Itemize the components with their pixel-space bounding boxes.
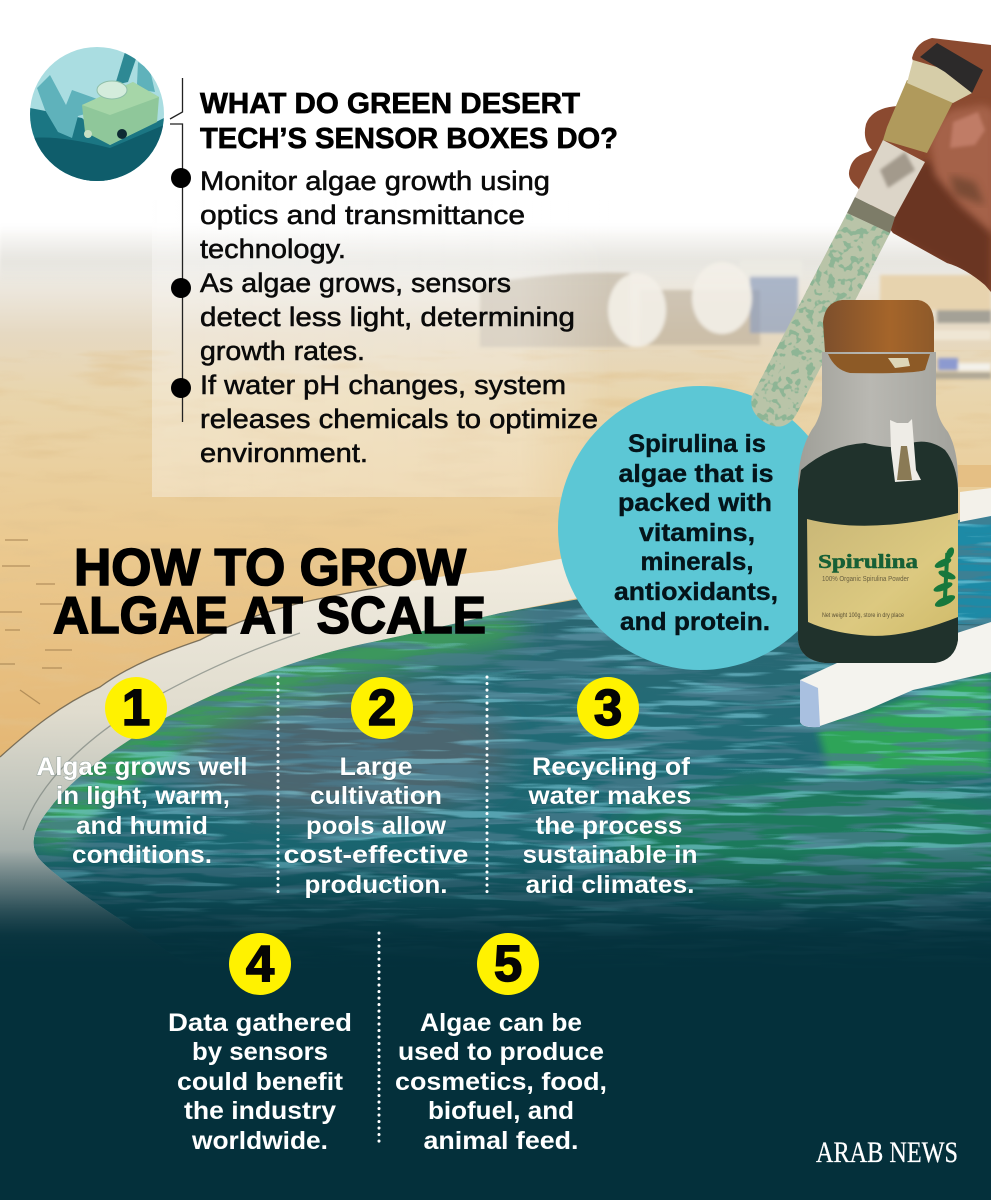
test tube (751, 213, 890, 427)
step 4 (168, 933, 352, 1155)
step 5: animal feed. (424, 1127, 578, 1155)
step 3: arid climates. (526, 871, 694, 899)
main title: ALGAE AT SCALE (53, 587, 486, 645)
step 5: biofuel, and (428, 1097, 574, 1125)
heading: what do sensor boxes do (200, 88, 618, 155)
text: sensor functions: growth rates. (200, 336, 365, 366)
step 1: conditions. (72, 841, 212, 869)
step 2 (284, 677, 469, 899)
step 5 (395, 933, 607, 1155)
step 5: used to produce (398, 1038, 604, 1066)
background: distant tanks and buildings (0, 225, 991, 379)
jar glass (798, 352, 958, 663)
step 4: the industry (184, 1097, 336, 1125)
callout circle: spirulina: Spirulina is (628, 430, 766, 458)
step 2: cultivation (310, 782, 442, 810)
step 2: production. (304, 871, 448, 899)
step 2: pools allow (306, 812, 447, 840)
hand (849, 38, 991, 292)
callout circle: spirulina: packed with (618, 489, 772, 517)
image: spirulina jar: Spirulina (818, 551, 918, 573)
text: sensor functions: If water pH changes, system (200, 370, 566, 400)
background: pool curb (0, 548, 620, 985)
heading: what do sensor boxes do: WHAT DO GREEN DESERT (200, 88, 580, 120)
label (807, 513, 958, 636)
step 4: worldwide. (191, 1127, 328, 1155)
label leaf (932, 546, 957, 609)
step 1: in light, warm, (56, 782, 230, 810)
step 2: 2 (368, 679, 396, 736)
bracket with bullet points (170, 78, 191, 422)
image: hand holding test tube (740, 38, 991, 435)
text: sensor functions: As algae grows, sensors (200, 268, 511, 298)
step 5: Algae can be (420, 1009, 582, 1037)
background: sand streaks (0, 540, 72, 704)
main title: HOW TO GROW (74, 539, 467, 597)
step 3: water makes (527, 782, 692, 810)
jar inner tag (890, 419, 921, 482)
step 4: could benefit (177, 1068, 344, 1096)
callout circle: spirulina: algae that is (618, 460, 774, 488)
callout circle: spirulina (558, 386, 842, 670)
text: sensor functions: optics and transmittance (200, 200, 525, 230)
text: sensor functions: detect less light, determining (200, 302, 575, 332)
text: sensor functions (200, 166, 598, 468)
image: spirulina jar: 100% Organic Spirulina Powder (822, 576, 910, 583)
cork (823, 300, 934, 352)
step 4: Data gathered (168, 1009, 352, 1037)
step 4: 4 (246, 935, 275, 992)
step 2: Large (340, 753, 413, 781)
step 5: cosmetics, food, (395, 1068, 607, 1096)
step 3: Recycling of (532, 753, 691, 781)
heading: what do sensor boxes do: TECH’S SENSOR BOXES DO? (200, 123, 618, 155)
text: sensor functions: releases chemicals to optimize (200, 404, 598, 434)
step 3 (522, 677, 698, 899)
step 3: sustainable in (522, 841, 698, 869)
callout circle: spirulina: and protein. (620, 608, 770, 636)
text: sensor functions: technology. (200, 234, 346, 264)
background: pool water (34, 516, 991, 954)
image: spirulina jar: Net weight 100g, store in dry place (822, 613, 905, 619)
step 4: by sensors (192, 1038, 328, 1066)
powder (798, 442, 958, 663)
text: sensor functions: environment. (200, 438, 368, 468)
photo: sensor box in teal duotone (30, 47, 164, 181)
callout circle: spirulina: vitamins, (639, 519, 755, 547)
step 5: 5 (494, 935, 522, 992)
translucent text panel (152, 200, 612, 497)
callout circle: spirulina: minerals, (640, 548, 754, 576)
main title (53, 539, 486, 645)
logo: Arab News: ARAB NEWS (816, 1136, 958, 1169)
step 3: 3 (594, 679, 622, 736)
step 1 (36, 677, 248, 869)
step 2: cost-effective (284, 841, 469, 869)
step 1: Algae grows well (36, 753, 248, 781)
step 3: the process (536, 812, 682, 840)
text: sensor functions: Monitor algae growth using (200, 166, 550, 196)
step 1: 1 (122, 679, 150, 736)
image: spirulina jar (798, 300, 958, 663)
callout circle: spirulina: antioxidants, (614, 578, 778, 606)
step 1: and humid (76, 812, 208, 840)
